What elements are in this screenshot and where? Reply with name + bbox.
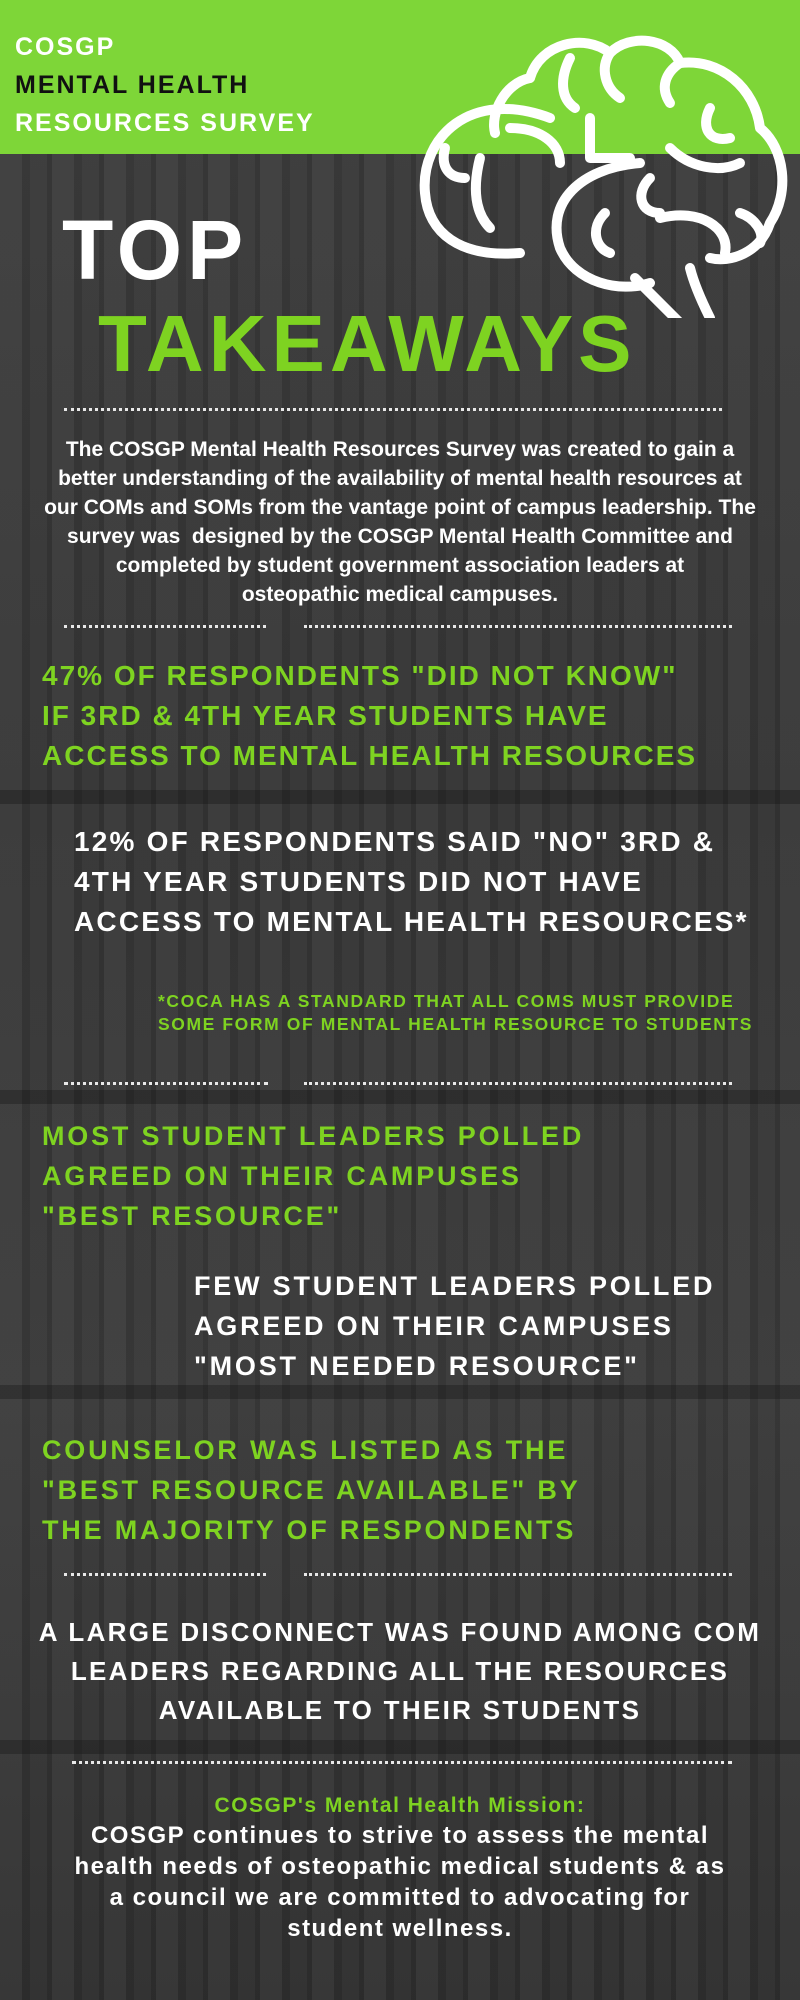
takeaway: best resource: MOST STUDENT LEADERS POLLED	[42, 1121, 584, 1151]
takeaway: 47% did not know: 47% OF RESPONDENTS "DID NOT KNOW"	[42, 660, 678, 691]
intro paragraph: our COMs and SOMs from the vantage point of campus leadership. The	[44, 496, 756, 519]
takeaway: 12% said no: ACCESS TO MENTAL HEALTH RESOURCES*	[74, 906, 749, 937]
takeaway: best resource: AGREED ON THEIR CAMPUSES	[42, 1161, 522, 1191]
takeaway: counselor	[42, 1435, 581, 1545]
mission statement: COSGP's Mental Health Mission:	[215, 1794, 585, 1817]
takeaway: 12% said no	[74, 826, 749, 937]
takeaway: 47% did not know: ACCESS TO MENTAL HEALTH RESOURCES	[42, 740, 697, 771]
mission statement: COSGP continues to strive to assess the mental	[91, 1822, 709, 1849]
footnote: COCA standard: SOME FORM OF MENTAL HEALTH RESOURCE TO STUDENTS	[158, 1014, 753, 1034]
takeaway: 12% said no: 4TH YEAR STUDENTS DID NOT HAVE	[74, 866, 643, 897]
takeaway: counselor: THE MAJORITY OF RESPONDENTS	[42, 1515, 576, 1545]
takeaway: large disconnect: LEADERS REGARDING ALL THE RESOURCES	[71, 1656, 729, 1686]
takeaway: best resource: "BEST RESOURCE"	[42, 1201, 342, 1231]
mission statement	[75, 1794, 725, 1942]
footnote: COCA standard: *COCA HAS A STANDARD THAT ALL COMS MUST PROVIDE	[158, 991, 734, 1011]
takeaway: 47% did not know: IF 3RD & 4TH YEAR STUDENTS HAVE	[42, 700, 609, 731]
heading: TAKEAWAYS: TAKEAWAYS	[98, 299, 636, 388]
takeaway: large disconnect	[39, 1617, 761, 1725]
takeaway: best resource	[42, 1121, 584, 1231]
takeaway: large disconnect: A LARGE DISCONNECT WAS FOUND AMONG COM	[39, 1617, 761, 1647]
takeaway: most needed resource	[194, 1271, 715, 1381]
takeaway: 47% did not know	[42, 660, 697, 771]
takeaway: counselor: "BEST RESOURCE AVAILABLE" BY	[42, 1475, 581, 1505]
mission statement: a council we are committed to advocating for	[110, 1884, 690, 1911]
header title	[15, 33, 315, 137]
header band	[0, 0, 800, 154]
header title: MENTAL HEALTH	[15, 71, 249, 99]
intro paragraph: completed by student government association leaders at	[116, 554, 684, 577]
takeaway: most needed resource: AGREED ON THEIR CAMPUSES	[194, 1311, 674, 1341]
takeaway: most needed resource: "MOST NEEDED RESOURCE"	[194, 1351, 640, 1381]
intro paragraph: survey was designed by the COSGP Mental Health Committee and	[67, 525, 733, 548]
header title: RESOURCES SURVEY	[15, 109, 315, 137]
intro paragraph: osteopathic medical campuses.	[242, 583, 558, 606]
takeaway: 12% said no: 12% OF RESPONDENTS SAID "NO" 3RD &	[74, 826, 715, 857]
mission statement: health needs of osteopathic medical students & as	[75, 1853, 725, 1880]
takeaway: most needed resource: FEW STUDENT LEADERS POLLED	[194, 1271, 715, 1301]
intro paragraph	[44, 438, 756, 606]
footnote: COCA standard	[158, 991, 753, 1034]
takeaway: counselor: COUNSELOR WAS LISTED AS THE	[42, 1435, 568, 1465]
takeaway: large disconnect: AVAILABLE TO THEIR STUDENTS	[159, 1695, 641, 1725]
mission statement: student wellness.	[287, 1915, 513, 1942]
header title: COSGP	[15, 33, 115, 61]
intro paragraph: The COSGP Mental Health Resources Survey was created to gain a	[66, 438, 734, 461]
heading: TOP: TOP	[62, 203, 248, 297]
icon: brain	[420, 36, 788, 318]
intro paragraph: better understanding of the availability of mental health resources at	[58, 467, 742, 490]
